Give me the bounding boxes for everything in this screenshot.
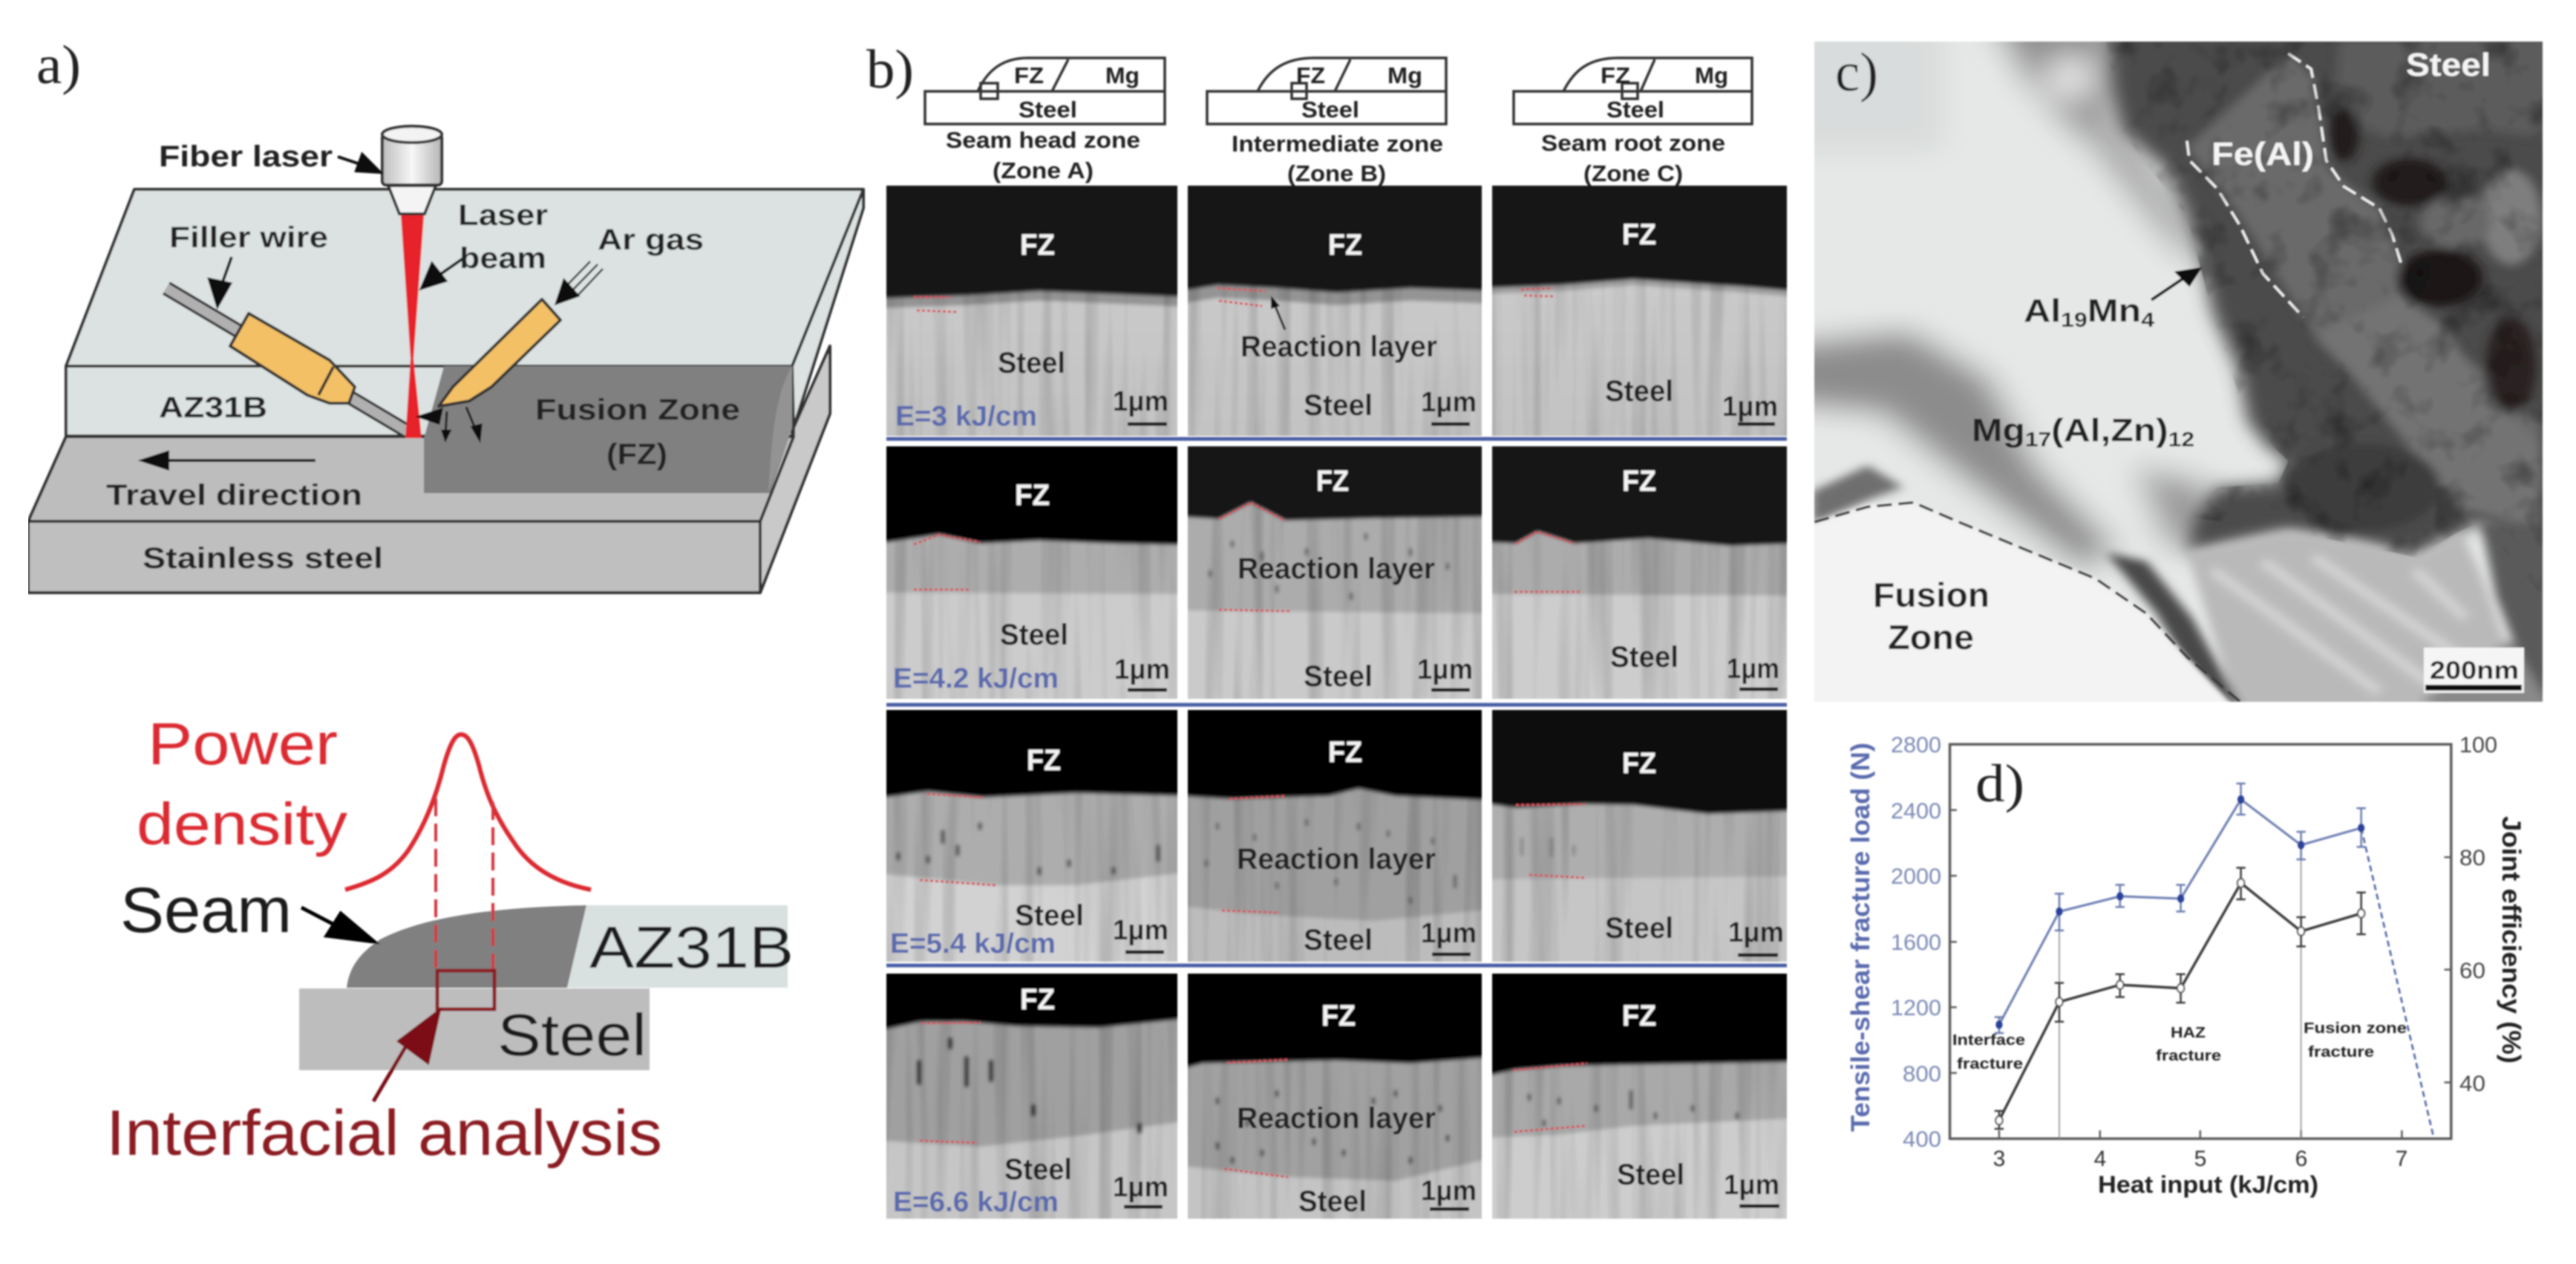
annotation: interface fracture: Interface	[1952, 1032, 2025, 1049]
row 3 labels: FZ	[1328, 736, 1362, 769]
label: density: density	[137, 791, 347, 857]
axes frame	[1950, 744, 2451, 1138]
annotation: fusion zone fracture	[2304, 1020, 2407, 1061]
panel b: micrographs by zone and heat input	[866, 39, 1794, 1226]
label: Power: Power	[148, 711, 338, 777]
dashed projection lines	[436, 798, 493, 970]
panel label b): b)	[866, 39, 914, 100]
label: Laser: Laser	[458, 199, 548, 232]
zone A schematic: Steel	[1019, 97, 1077, 123]
red interface markers	[914, 288, 1587, 1177]
right axis tick labels: 40	[2459, 1072, 2485, 1096]
right axis tick labels: 100	[2459, 733, 2497, 758]
Al19Mn4 arrow	[2151, 267, 2202, 300]
label: Stainless steel: Stainless steel	[143, 542, 383, 575]
left axis tick labels: 2000	[1891, 864, 1941, 889]
arrow to interfacial analysis box	[373, 1011, 439, 1101]
zone A schematic: FZ	[1014, 62, 1044, 88]
row separators	[886, 439, 1787, 965]
zone C schematic: Mg	[1695, 62, 1728, 88]
row 4 labels: FZ	[1321, 1000, 1356, 1032]
row 2 column 3 image	[1485, 439, 1794, 706]
laser beam	[401, 215, 424, 438]
zone B schematic: Steel	[1301, 97, 1359, 123]
row 4 labels: 1μm	[1421, 1176, 1477, 1207]
annotation: interface fracture: fracture	[1957, 1056, 2023, 1072]
label: Steel: Steel	[497, 1002, 647, 1068]
row 1 labels: E=3 kJ/cm	[895, 401, 1037, 432]
label: Seam: Seam	[120, 875, 292, 946]
label: Interfacial analysis: Interfacial analysis	[106, 1098, 662, 1169]
row 3 labels: E=5.4 kJ/cm	[890, 928, 1056, 960]
x axis tick labels: 5	[2194, 1147, 2206, 1171]
x axis tick labels: 4	[2094, 1147, 2106, 1171]
row 1 labels: 1μm	[1421, 387, 1477, 418]
label: (FZ): (FZ)	[607, 438, 667, 471]
AZ31B cross section	[567, 905, 788, 988]
zone C schematic	[1514, 58, 1752, 186]
label: Travel direction: Travel direction	[106, 479, 362, 512]
panel label a): a)	[36, 35, 81, 96]
zone A schematic: (Zone A)	[993, 157, 1094, 183]
row 1 column 1 image	[879, 178, 1185, 443]
annotation: fusion zone fracture: Fusion zone	[2304, 1020, 2407, 1037]
row 2 labels	[893, 465, 1779, 694]
fracture load series	[1995, 784, 2366, 1033]
row 2 labels: FZ	[1316, 465, 1349, 498]
AZ31B plate	[66, 189, 863, 436]
fracture mode dividers	[2059, 859, 2301, 1138]
row 4 labels: 1μm	[1724, 1170, 1779, 1201]
row 2 labels: FZ	[1622, 465, 1656, 498]
vertical streak texture	[886, 186, 1787, 1219]
x axis tick labels: 6	[2295, 1147, 2307, 1171]
zone B schematic: Mg	[1387, 62, 1422, 88]
row 1 column 3 image	[1485, 178, 1794, 443]
label: Al19Mn4: Mn	[2088, 293, 2141, 329]
label: AZ31B: AZ31B	[589, 914, 794, 980]
seam arrow	[301, 908, 374, 942]
label: Al19Mn4: Al	[2024, 293, 2056, 329]
left axis title: Tensile-shear fracture load (N)	[1846, 743, 1875, 1132]
row 1 column 2 image	[1180, 178, 1489, 443]
right axis tick labels: 60	[2459, 959, 2485, 983]
label: Al19Mn4: 4	[2141, 308, 2154, 331]
label: Zone: Zone	[1888, 618, 1974, 657]
right axis title: Joint efficiency (%)	[2497, 816, 2526, 1063]
x axis tick labels	[1993, 1147, 2407, 1171]
row 2 column 2 image	[1180, 439, 1489, 706]
label: Mg17(Al,Zn)12: 12	[2168, 428, 2194, 451]
annotation: interface fracture	[1952, 1032, 2025, 1072]
row 4 column 3 image	[1485, 966, 1794, 1226]
row 2 labels: Steel	[1610, 641, 1678, 674]
row 2 labels: Steel	[1000, 619, 1068, 651]
right axis tick labels: 80	[2459, 846, 2485, 870]
row 4 labels: Steel	[1617, 1159, 1684, 1191]
joint efficiency markers	[1995, 879, 2364, 1124]
row 4 labels: Steel	[1298, 1185, 1367, 1218]
row 1 labels: Steel	[1304, 389, 1373, 422]
arrows for labels	[143, 154, 603, 469]
label: Ar gas: Ar gas	[598, 224, 704, 256]
annotation: HAZ fracture	[2156, 1025, 2221, 1064]
power density curve	[345, 734, 591, 890]
label: Filler wire: Filler wire	[169, 221, 328, 254]
stainless steel plate	[28, 346, 830, 593]
zone C schematic: Steel	[1606, 97, 1664, 123]
row 3 labels: 1μm	[1421, 918, 1477, 949]
left axis tick labels: 1600	[1891, 931, 1941, 955]
row 2 labels: 1μm	[1417, 654, 1473, 685]
scale bar 200 nm: 200nm	[2430, 657, 2519, 685]
fusion zone	[424, 366, 792, 493]
left axis tick labels: 1200	[1891, 996, 1941, 1020]
label: Steel: Steel	[2406, 47, 2491, 83]
zone A schematic	[925, 58, 1165, 183]
wire nozzle	[230, 313, 355, 403]
row 4 column 2 image	[1180, 966, 1489, 1226]
row 1 labels: 1μm	[1113, 386, 1168, 417]
x axis tick labels: 7	[2396, 1147, 2407, 1171]
dashed extrapolation	[2361, 828, 2434, 1138]
steel cross section	[299, 988, 650, 1070]
row 3 labels: 1μm	[1113, 915, 1168, 946]
fracture load markers	[1995, 795, 2364, 1029]
zone B schematic	[1207, 58, 1446, 186]
row 3 labels: Steel	[1605, 912, 1673, 945]
row 3 labels: Reaction layer	[1237, 843, 1436, 876]
label: Fusion Zone: Fusion Zone	[535, 394, 740, 426]
argon gas nozzle	[439, 299, 560, 406]
row 4 labels: FZ	[1020, 983, 1055, 1016]
row 4 labels: E=6.6 kJ/cm	[893, 1187, 1059, 1218]
label: Al19Mn4: 19	[2061, 308, 2088, 331]
row 4 labels: 1μm	[1113, 1172, 1168, 1203]
label: Mg17(Al,Zn)12: 17	[2025, 428, 2051, 451]
row 1 labels: Reaction layer	[1240, 330, 1437, 363]
zone C schematic: (Zone C)	[1583, 160, 1683, 186]
row 3 labels	[890, 736, 1784, 960]
right axis tick labels	[2459, 733, 2497, 1096]
row 4 labels: Reaction layer	[1237, 1102, 1436, 1135]
panel c: TEM micrograph	[1731, 0, 2576, 770]
zone A schematic: Seam head zone	[946, 127, 1140, 153]
mottled grain texture	[1814, 42, 2543, 702]
row 1 labels: Steel	[998, 347, 1065, 379]
row 4 column 1 image	[879, 966, 1185, 1226]
row 1 labels: Steel	[1605, 375, 1673, 408]
left axis tick labels: 400	[1903, 1127, 1941, 1152]
row 3 labels: Steel	[1015, 899, 1084, 932]
row 3 column 1 image	[879, 703, 1185, 969]
row 3 labels: FZ	[1622, 747, 1656, 780]
row 2 labels: FZ	[1015, 479, 1050, 512]
row 4 labels: Steel	[1004, 1153, 1072, 1186]
label: Fe(Al): Fe(Al)	[2211, 136, 2314, 172]
panel label d): d)	[1975, 754, 2024, 813]
label: Mg17(Al,Zn)12: (Al,Zn)	[2051, 412, 2168, 449]
row 3 labels: FZ	[1027, 744, 1061, 777]
filler wire core	[166, 288, 408, 431]
row 2 labels: E=4.2 kJ/cm	[893, 663, 1059, 694]
row 2 labels: 1μm	[1727, 654, 1779, 685]
row 1 labels: FZ	[1328, 229, 1362, 261]
panel label c): c)	[1835, 42, 1878, 103]
left axis tick labels	[1891, 733, 1941, 1152]
label: beam: beam	[460, 242, 546, 275]
row 1 labels: FZ	[1020, 229, 1055, 261]
row 3 labels: 1μm	[1728, 917, 1784, 948]
row 3 labels: Steel	[1304, 924, 1373, 957]
TEM image	[1731, 0, 2576, 770]
weld gas arrows	[419, 407, 481, 440]
filler wire	[166, 288, 408, 431]
label: AZ31B: AZ31B	[159, 391, 267, 424]
zone B schematic: FZ	[1296, 62, 1325, 88]
seam cross section	[347, 905, 586, 988]
row 1 labels	[895, 218, 1778, 432]
row 3 column 2 image	[1180, 703, 1489, 969]
row 1 labels: 1μm	[1722, 391, 1778, 423]
row 1 labels: FZ	[1622, 218, 1656, 251]
phase boundary dashed lines	[1814, 53, 2402, 702]
panel a: laser welding setup and interfacial analysis	[28, 35, 863, 1169]
left axis tick labels: 2800	[1891, 733, 1941, 758]
row 4 labels	[893, 983, 1779, 1218]
x axis tick labels: 3	[1993, 1147, 2005, 1171]
x axis title: Heat input (kJ/cm)	[2098, 1171, 2318, 1198]
joint efficiency series	[1995, 868, 2366, 1129]
zone B schematic: (Zone B)	[1287, 160, 1386, 186]
zone C schematic: FZ	[1601, 62, 1630, 88]
panel d: fracture load and joint efficiency chart	[1846, 733, 2526, 1198]
scale bar 200 nm	[2424, 648, 2524, 693]
annotation: HAZ fracture: HAZ	[2171, 1025, 2206, 1041]
row 2 labels: Steel	[1304, 660, 1373, 693]
label: Fusion: Fusion	[1873, 576, 1990, 614]
zone C schematic: Seam root zone	[1541, 130, 1725, 156]
diagram: lap joint welding schematic	[28, 126, 863, 593]
annotation: HAZ fracture: fracture	[2156, 1048, 2221, 1064]
left axis tick labels: 2400	[1891, 799, 1941, 824]
micrograph grid images	[879, 178, 1794, 1226]
fiber laser head	[382, 126, 442, 214]
row 3 column 3 image	[1485, 703, 1794, 969]
zone A schematic: Mg	[1105, 62, 1140, 88]
left axis tick labels: 800	[1903, 1062, 1941, 1087]
annotation: fusion zone fracture: fracture	[2308, 1044, 2374, 1061]
label: Mg17(Al,Zn)12: Mg	[1972, 412, 2019, 449]
interfacial analysis box	[437, 971, 494, 1009]
row 2 labels: Reaction layer	[1238, 553, 1435, 585]
row 2 column 1 image	[879, 439, 1185, 706]
diagram: power density over seam	[106, 711, 794, 1169]
chart axes and series	[1950, 744, 2451, 1138]
zone B schematic: Intermediate zone	[1232, 131, 1443, 157]
label: Fiber laser: Fiber laser	[159, 140, 333, 173]
row 4 labels: FZ	[1622, 1000, 1656, 1032]
row 2 labels: 1μm	[1114, 654, 1170, 685]
